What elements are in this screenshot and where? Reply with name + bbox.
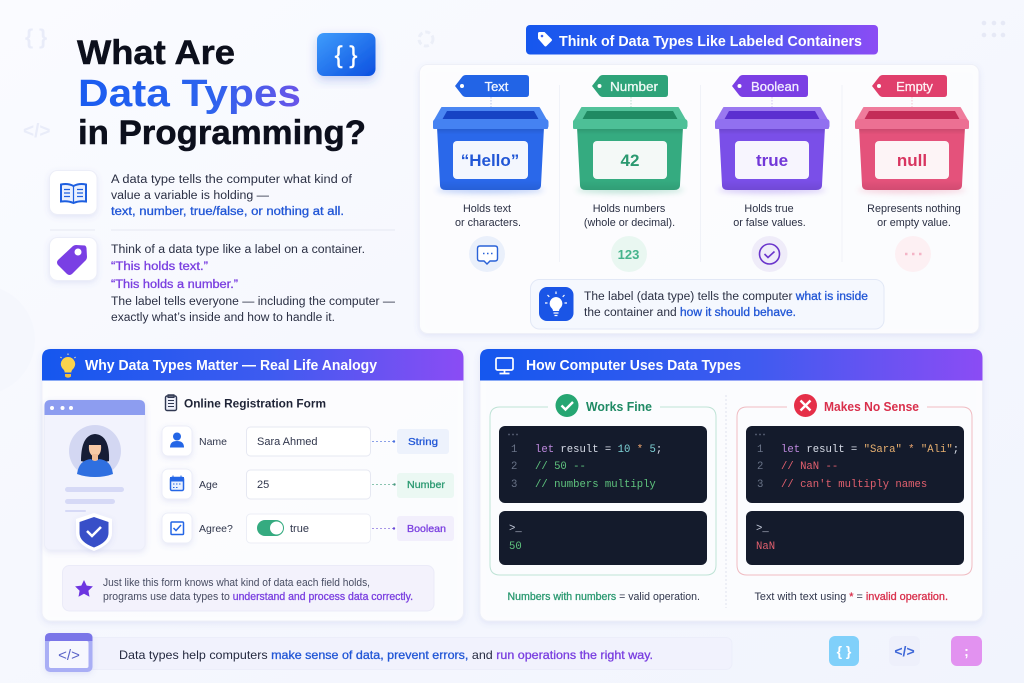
caption: Number: (whole or decimal). [584,217,675,229]
form row: Age: 25 [257,479,269,491]
title [77,34,366,152]
icon: code tile: </> [894,643,915,659]
callout: label tells the computer [530,280,884,329]
panel: how computer uses data types [480,349,982,621]
container: Text [433,108,548,194]
icon: code window: </> [58,647,80,664]
icon: code tile [889,636,920,666]
icon: shield [76,513,112,551]
container: Empty: null [897,151,927,170]
icon: code window [45,633,92,672]
decorative dots [982,21,1005,37]
form row: Name: Sara Ahmed [257,436,318,448]
title: in Programming? [78,114,366,152]
caption: Number: Holds numbers [593,203,666,215]
heading: labeled containers [526,25,878,54]
code editor: 3 [757,479,763,491]
form row: Name: Name [199,436,227,448]
callout: label tells the computer: the container and how it should behave. [584,307,796,319]
icon: braces badge [317,33,376,76]
tag: Number: Number [610,79,659,94]
terminal output: 50 [509,541,522,553]
tag: Empty: Empty [896,79,933,94]
text block: definition: A data type tells the computer what kind of [111,174,353,186]
container: Text: “Hello” [461,151,519,170]
illustration: profile card [44,400,145,550]
text block: label analogy: “This holds text.” [111,261,208,273]
callout: form analogy: Just like this form knows what kind of data each field holds, [103,577,370,589]
code editor [746,426,964,503]
form row: Age: Number [407,479,445,491]
caption: Empty: Represents nothing [867,203,961,215]
panel: works fine [490,394,716,575]
terminal output [499,511,707,565]
icon: speech bubble [469,236,505,272]
text block: definition: value a variable is holding — [111,190,270,202]
form row: Agree: Agree? [199,523,233,535]
code editor: 2 [511,461,517,473]
decorative code glyphs: </> [23,121,50,142]
text block: definition: text, number, true/false, or nothing at all. [111,206,344,218]
icon: open book [50,170,97,214]
caption: Empty: or empty value. [877,217,951,229]
heading: real life analogy: Why Data Types Matter — Real Life Analogy [85,357,378,374]
title: What Are [77,34,235,72]
code editor: // NaN -- [781,461,838,473]
icon: purple tag [50,238,97,280]
code editor: 2 [757,461,763,473]
caption: Number [584,203,675,229]
container: Boolean: true [756,151,788,170]
caption: Empty [867,203,961,229]
icon: check circle [752,236,788,272]
container: Number: 42 [621,151,639,170]
icon: 123: 123 [618,247,639,262]
form row: Age: Age [199,479,218,491]
panel: makes no sense: Makes No Sense [824,399,919,414]
decorative code glyphs: { } [25,26,47,49]
form row: Agree: Boolean [407,523,446,535]
caption: Boolean: or false values. [733,217,806,229]
icon: semicolon tile [951,636,982,666]
tag: Boolean: Boolean [751,79,799,94]
terminal output: >_ [756,523,769,535]
terminal output [746,511,964,565]
form row: Age [162,469,454,499]
form row: Name: String [408,436,438,448]
code editor: 3 [511,479,517,491]
icon: braces tile [829,636,859,666]
text block: label analogy: “This holds a number.” [111,279,238,291]
icon: semicolon tile: ; [964,643,969,659]
form row: Name [162,426,449,456]
tag: Boolean [732,75,808,107]
callout: label tells the computer: The label (data type) tells the computer what is inside [584,291,868,303]
caption: valid operation: Numbers with numbers = valid operation. [508,591,700,603]
tag: Empty [872,75,947,107]
heading: how computer uses data types [480,349,982,380]
panel: makes no sense [737,394,972,575]
terminal output: NaN [756,541,775,553]
footer summary bar [45,633,732,672]
code editor: // numbers multiply [535,479,656,491]
code editor: 1 [757,444,763,456]
icon: three dots [895,236,931,272]
code editor [499,426,707,503]
heading: real life analogy [42,349,464,380]
form row: Agree [162,513,454,543]
terminal output: >_ [509,523,522,535]
footer summary bar: Data types help computers make sense of data, prevent errors, and run operations the right way. [119,648,653,662]
code editor: let result = 10 * 5; [535,444,662,456]
decorative code glyphs [23,26,433,142]
title: Data Types [78,73,301,115]
code editor: // 50 -- [535,461,586,473]
container: Boolean [715,108,830,194]
caption: invalid operation: Text with text using * = invalid operation. [754,591,948,603]
text block: label analogy: exactly what’s inside and how to handle it. [111,312,335,324]
code editor: 1 [511,444,517,456]
heading: how computer uses data types: How Computer Uses Data Types [526,357,741,374]
panel: works fine: Works Fine [586,399,652,414]
form row: Agree: true [290,523,309,535]
caption: Text: Holds text [463,203,511,215]
icon: 123 [611,236,647,272]
tag: Text: Text [485,79,509,94]
heading: labeled containers: Think of Data Types Like Labeled Containers [559,33,862,50]
form title: Online Registration Form [184,396,326,410]
panel: real life analogy [42,349,464,621]
tag: Text [455,75,529,107]
tag: Number [592,75,668,107]
text block: label analogy [111,244,396,324]
caption: Boolean [733,203,806,229]
caption: Text: or characters. [455,217,521,229]
callout: form analogy: programs use data types to understand and process data correctly. [103,591,413,603]
text block: label analogy: Think of a data type like a label on a container. [111,244,365,256]
text block: label analogy: The label tells everyone — including the computer — [111,296,396,308]
code editor: // can't multiply names [781,479,927,491]
container: Empty [855,108,969,194]
text block: definition [111,174,353,218]
icon: braces badge: { } [335,42,357,69]
callout: form analogy [62,566,434,611]
caption: Boolean: Holds true [744,203,794,215]
panel: labeled containers [420,64,979,334]
icon: braces tile: { } [837,643,852,659]
code editor: let result = "Sara" * "Ali"; [781,444,959,456]
caption: Text [455,203,521,229]
container: Number [573,108,688,194]
